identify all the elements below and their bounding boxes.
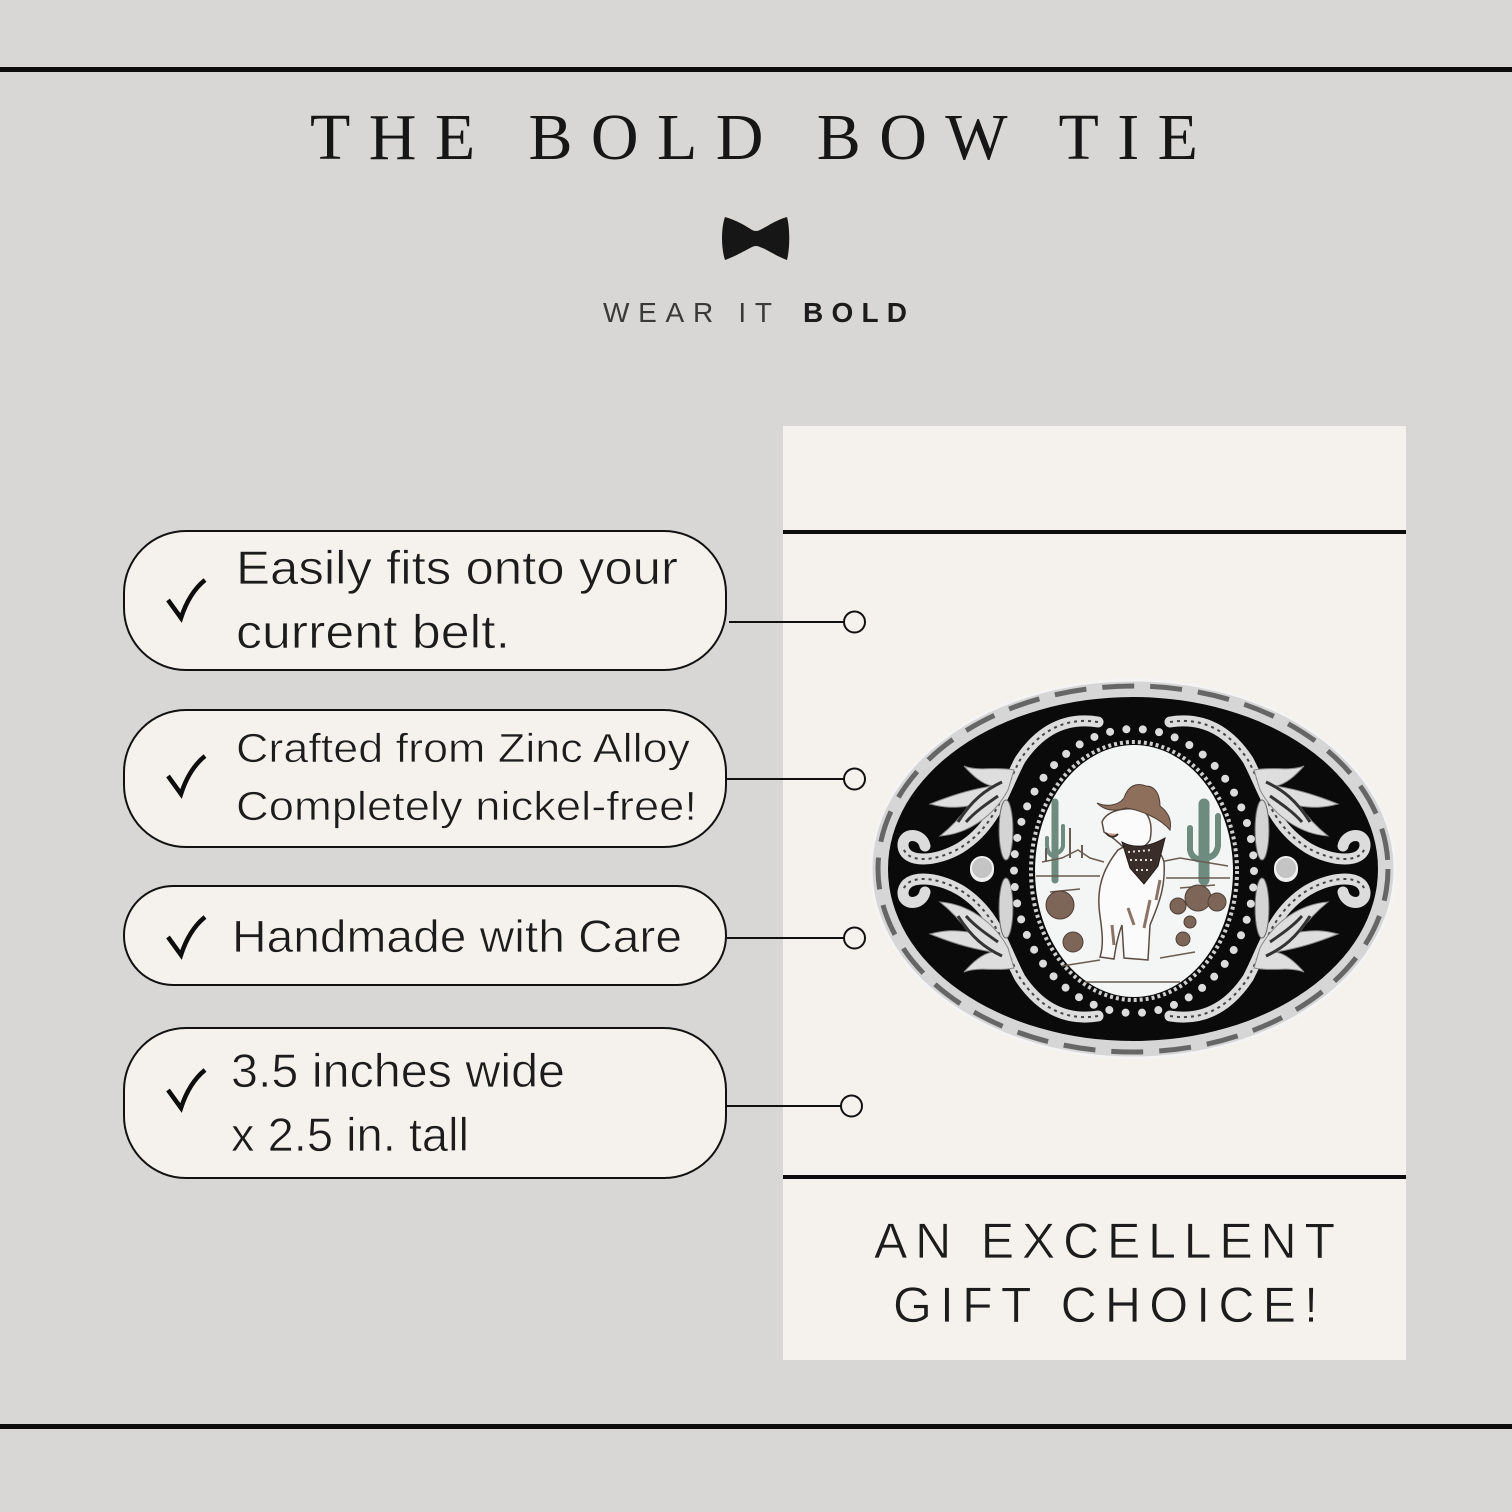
feature pill: fit: Easily fits onto your: [236, 541, 678, 594]
gift text: GIFT CHOICE!: [893, 1277, 1318, 1333]
feature pill: handmade: [124, 886, 726, 985]
feature pill: material: Crafted from Zinc Alloy: [236, 725, 691, 771]
connector 4: [727, 1096, 862, 1116]
buckle rim: [870, 679, 1396, 1059]
connector 2: [727, 768, 865, 790]
tagline: WEAR IT: [603, 297, 772, 328]
icon: bow tie: [722, 217, 789, 260]
dog head: [1102, 809, 1151, 850]
feature pill: material: [124, 710, 726, 847]
gift text: AN EXCELLENT: [874, 1213, 1335, 1269]
dog illustration medallion: [1035, 745, 1233, 997]
ground sketch: [1036, 828, 1230, 982]
beaded ring: [1014, 729, 1254, 1013]
cacti: [1047, 802, 1218, 880]
rope edge: [1031, 742, 1237, 1000]
connector 3: [727, 928, 865, 948]
feature pill: size: x 2.5 in. tall: [231, 1108, 469, 1161]
feature pill: size: [124, 1028, 726, 1178]
belt buckle: [870, 679, 1396, 1059]
dog: [1097, 784, 1171, 960]
feature pill: material: Completely nickel-free!: [236, 783, 697, 829]
feature pill: fit: current belt.: [236, 605, 510, 658]
connector 1: [729, 612, 865, 632]
feature pill: handmade: Handmade with Care: [232, 911, 682, 962]
buckle black field: [888, 697, 1378, 1041]
tagline: BOLD: [803, 297, 907, 328]
gift text: [874, 1213, 1335, 1333]
filigree scrolls: [903, 721, 1365, 1017]
cowboy hat: [1097, 784, 1171, 830]
title: THE BOLD BOW TIE: [310, 101, 1198, 174]
panel: gift card: [783, 426, 1406, 1360]
feature pill: fit: [124, 531, 726, 670]
tagline: [603, 297, 907, 328]
feature pill: size: 3.5 inches wide: [231, 1044, 565, 1097]
barrel cacti: [1046, 885, 1226, 952]
bandana: [1122, 838, 1165, 884]
